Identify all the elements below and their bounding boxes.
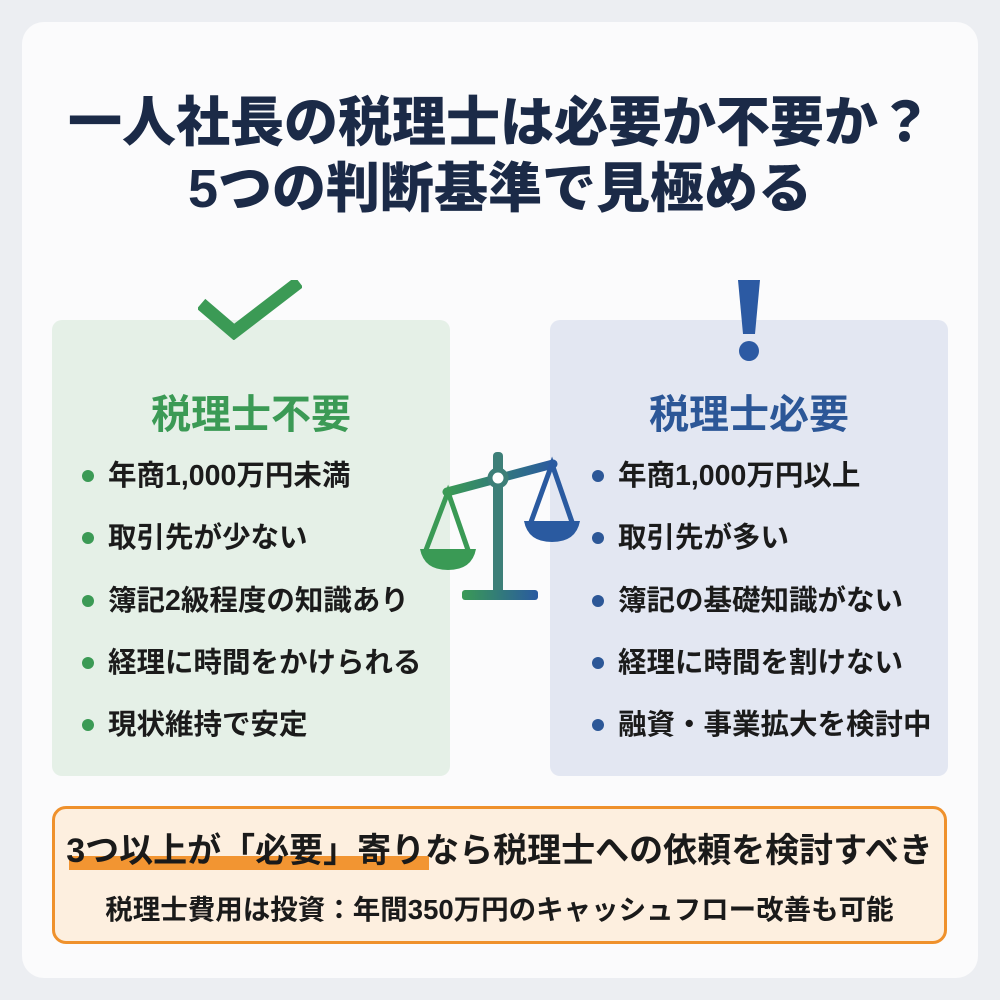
icon: exclamation: [738, 280, 760, 361]
callout line 2: 税理士費用は投資：年間350万円のキャッシュフロー改善も可能: [105, 894, 894, 925]
heading: needed: 税理士必要: [649, 393, 849, 437]
list: needed: 簿記の基礎知識がない: [618, 585, 903, 617]
icon: scale: [420, 452, 580, 600]
highlight: [69, 856, 429, 870]
callout line 1: 3つ以上が「必要」寄りなら税理士への依頼を検討すべき: [66, 832, 933, 870]
icon: checkmark: [198, 280, 302, 340]
list: not needed: 取引先が少ない: [108, 522, 308, 554]
callout: conclusion: [52, 806, 947, 944]
panel: needed: [550, 320, 948, 776]
list: needed: 経理に時間を割けない: [618, 647, 903, 679]
title: [68, 93, 932, 219]
list: not needed: 年商1,000万円未満: [108, 460, 350, 492]
list: needed: 融資・事業拡大を検討中: [618, 709, 932, 741]
list: not needed: 簿記2級程度の知識あり: [108, 585, 409, 617]
list: needed: 取引先が多い: [618, 522, 789, 554]
list: needed: [592, 460, 932, 741]
list: needed: 年商1,000万円以上: [618, 460, 860, 492]
panel: not needed: [52, 320, 450, 776]
list: not needed: [82, 460, 422, 741]
list: not needed: 現状維持で安定: [108, 709, 308, 741]
title: 5つの判断基準で見極める: [188, 159, 812, 219]
list: not needed: 経理に時間をかけられる: [108, 647, 422, 679]
heading: not needed: 税理士不要: [151, 393, 351, 437]
title: 一人社長の税理士は必要か不要か？: [68, 93, 932, 153]
